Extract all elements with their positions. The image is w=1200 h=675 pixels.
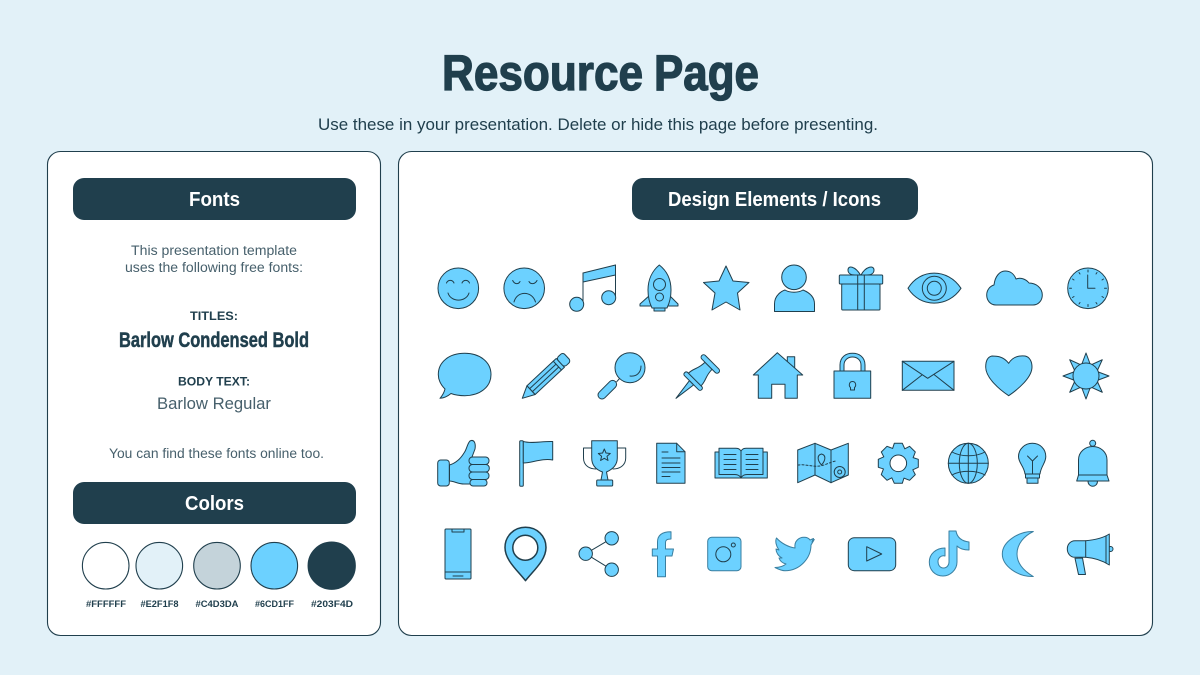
panel: design elements and icons bbox=[398, 152, 1152, 636]
icon: sad face bbox=[504, 268, 544, 309]
icon: tiktok bbox=[929, 531, 969, 576]
icon: star bbox=[704, 266, 749, 310]
heading: design elements: Design Elements / Icons bbox=[668, 189, 881, 211]
color hex labels bbox=[86, 599, 354, 609]
panel: fonts and colors bbox=[48, 152, 380, 636]
icon: instagram bbox=[708, 537, 741, 571]
icon: person bbox=[774, 265, 814, 312]
subtitle: Use these in your presentation. Delete or hide this page before presenting. bbox=[318, 115, 878, 134]
heading: colors: Colors bbox=[185, 493, 244, 515]
heading: design elements bbox=[632, 178, 918, 220]
text: body font name: Barlow Regular bbox=[157, 395, 271, 413]
icon: globe bbox=[948, 443, 988, 483]
icon: clock bbox=[1068, 268, 1108, 309]
icon: trophy bbox=[584, 441, 626, 486]
text: find fonts online: You can find these fonts online too. bbox=[109, 446, 324, 461]
icon: padlock bbox=[834, 353, 871, 398]
icon: sun bbox=[1063, 353, 1109, 399]
title: Resource bbox=[442, 45, 643, 101]
icon: cloud bbox=[987, 271, 1042, 305]
icon: thumbs up bbox=[438, 440, 489, 486]
text: font intro: This presentation template bbox=[131, 243, 297, 258]
icon: speech bubble bbox=[438, 353, 491, 398]
icon: pencil bbox=[518, 352, 571, 403]
icon: smile bbox=[438, 268, 479, 309]
icon: video play button bbox=[848, 538, 896, 571]
icon: flag bbox=[520, 441, 553, 486]
icon: push pin bbox=[668, 354, 721, 407]
icon: smartphone bbox=[445, 529, 471, 579]
icon: envelope bbox=[902, 361, 954, 390]
text: font intro bbox=[125, 243, 303, 275]
color hex labels: #C4D3DA bbox=[196, 599, 239, 609]
icon: eye bbox=[908, 273, 961, 303]
icon: twitter bird bbox=[775, 537, 814, 571]
icon: crescent moon bbox=[1002, 531, 1033, 577]
color hex labels: #6CD1FF bbox=[255, 599, 294, 609]
icon: gift bbox=[839, 267, 883, 310]
color hex labels: #FFFFFF bbox=[86, 599, 127, 609]
title: Page bbox=[654, 45, 759, 101]
icon: location marker bbox=[505, 527, 546, 581]
icon: document bbox=[657, 443, 685, 483]
text: body label: BODY TEXT: bbox=[178, 374, 250, 388]
icon: heart bbox=[986, 356, 1032, 396]
heading: colors bbox=[73, 482, 356, 524]
text: title font name: Barlow Condensed Bold bbox=[119, 329, 309, 352]
color hex labels: #E2F1F8 bbox=[140, 599, 178, 609]
text: font intro: uses the following free fonts: bbox=[125, 260, 303, 275]
color hex labels: #203F4D bbox=[311, 599, 354, 609]
icon: megaphone bbox=[1067, 534, 1113, 574]
text: titles label: TITLES: bbox=[190, 309, 238, 323]
icon: open book bbox=[715, 448, 767, 478]
icon: facebook bbox=[652, 532, 674, 577]
icon: share bbox=[579, 532, 618, 576]
icon: house bbox=[753, 353, 803, 398]
icon: gear bbox=[878, 443, 918, 483]
icon: bell bbox=[1077, 440, 1109, 486]
icon: light bulb bbox=[1018, 443, 1046, 483]
heading: fonts bbox=[73, 178, 356, 220]
icon: magnifying glass bbox=[596, 353, 645, 401]
icon: rocket bbox=[640, 265, 678, 311]
heading: fonts: Fonts bbox=[189, 189, 240, 211]
icon: folded map bbox=[798, 443, 848, 483]
icon: music note bbox=[570, 265, 616, 311]
color swatches bbox=[82, 542, 355, 589]
